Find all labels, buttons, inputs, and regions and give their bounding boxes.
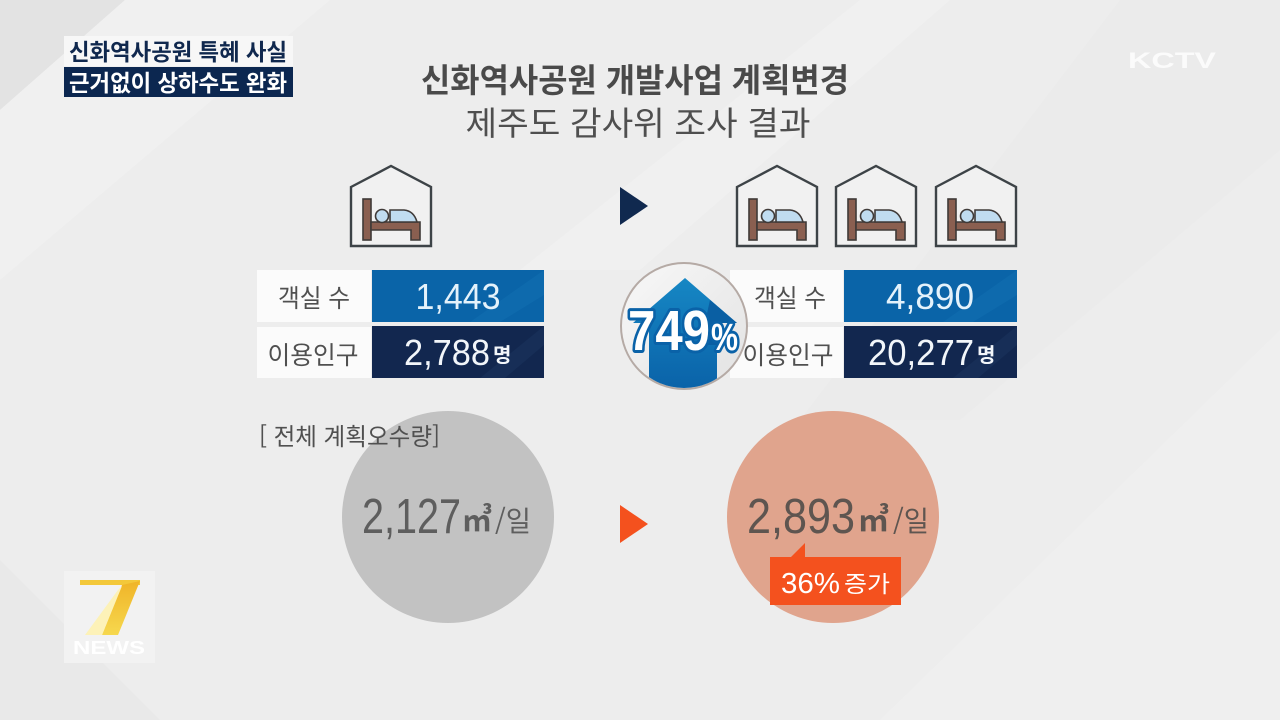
- unit: persons: 명: [493, 339, 511, 368]
- label: users: 이용인구: [268, 336, 358, 372]
- callout: 36% increase: 증가: [844, 565, 890, 599]
- channel logo: KCTV: KCTV: [1128, 48, 1216, 73]
- icon: room after 2: [836, 166, 916, 246]
- headline line 2: 근거없이 상하수도 완화: [69, 64, 287, 98]
- headline line 1: 신화역사공원 특혜 사실: [69, 33, 287, 67]
- callout: 36% increase: 36%: [781, 568, 840, 600]
- label: rooms: 객실 수: [754, 279, 826, 315]
- value: rooms: 1,443: [416, 276, 500, 317]
- table: before: [257, 270, 544, 378]
- headline box: [64, 33, 293, 97]
- value: rooms: 4,890: [886, 276, 974, 317]
- unit: ㎥: [858, 495, 889, 541]
- callout: 36% increase: [770, 543, 901, 605]
- label: total planned sewage: [ 전체 계획오수량]: [259, 417, 440, 452]
- arrow: sewage increase: [620, 505, 648, 543]
- circle: planned sewage before: [342, 411, 554, 623]
- value: users: 2,788: [404, 332, 490, 373]
- subtitle: 제주도 감사위 조사 결과: [466, 97, 810, 145]
- program logo: 7 NEWS: [64, 571, 155, 663]
- icon: room before: [351, 166, 431, 246]
- table: after: [730, 270, 1017, 378]
- value: 2,893: [747, 490, 855, 544]
- unit: per day: /일: [893, 500, 929, 540]
- icon: room after 1: [737, 166, 817, 246]
- unit: per day: /일: [495, 500, 531, 540]
- unit: persons: 명: [977, 339, 995, 368]
- icon: room after 3: [936, 166, 1016, 246]
- value: users: 20,277: [868, 332, 974, 373]
- unit: ㎥: [462, 495, 492, 541]
- badge: 749% increase: %: [711, 317, 738, 359]
- arrow: rooms increase: [620, 187, 648, 225]
- label: rooms: 객실 수: [278, 279, 350, 315]
- label: users: 이용인구: [742, 336, 834, 372]
- badge: 749% increase: 749: [628, 299, 710, 363]
- program logo: 7 NEWS: NEWS: [73, 638, 145, 658]
- badge: 749% increase: [621, 263, 747, 390]
- circle: planned sewage after: [727, 411, 939, 623]
- title: 신화역사공원 개발사업 계획변경: [421, 54, 849, 102]
- value: 2,127: [362, 490, 461, 544]
